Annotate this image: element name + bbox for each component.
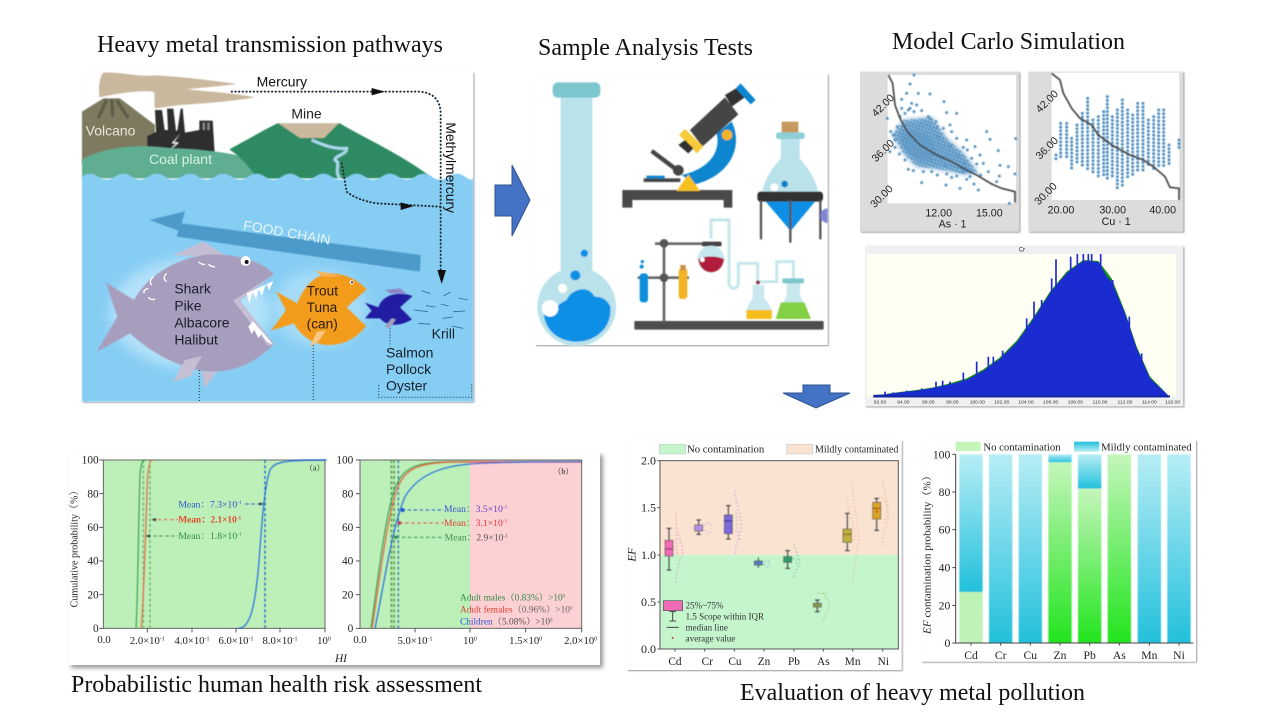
axes labels: 2.0×10 (130, 636, 160, 647)
axes labels: 6.0×10 (218, 636, 248, 647)
mean labels: （b） (553, 467, 573, 476)
mine hill (229, 123, 433, 178)
axes labels: 60 (342, 522, 354, 534)
chart: As scatter: 42.00 (870, 92, 897, 119)
bar: Ni (1167, 454, 1191, 643)
axes labels: 0 (945, 637, 951, 650)
chart: Cr histogram: 98.00 (946, 400, 959, 406)
panel: laboratory tests illustration (535, 73, 828, 346)
fish: small blue (365, 288, 413, 328)
axes labels: Cr (702, 656, 713, 668)
food web labels: Krill (432, 326, 455, 342)
legend: contamination classes (659, 444, 899, 455)
axes labels: As (1113, 649, 1126, 662)
smoke plume (99, 72, 255, 108)
chart: Cr histogram: 100.00 (970, 400, 985, 406)
fish names: large: Albacore (174, 315, 230, 331)
legend: contamination classes: Mildly contaminated (815, 444, 899, 455)
chart: Cr histogram: Cr (1019, 248, 1025, 254)
axes labels: 0 (539, 637, 542, 643)
axes labels (626, 454, 889, 668)
axes labels: Zn (1054, 649, 1067, 662)
legend: box plot key: 1.5 Scope within IQR (686, 612, 764, 622)
mean labels: Mean：7.3×10 (178, 499, 237, 510)
axes labels: -1 (248, 637, 253, 643)
legend: probability classes: Mildly contaminated (1101, 443, 1192, 454)
chart: Cu scatter: 42.00 (1034, 88, 1061, 115)
axes labels: 1.0 (641, 548, 656, 562)
bar: Mn (1138, 454, 1161, 643)
title: simulation: Model Carlo Simulation (892, 29, 1125, 55)
chart: Cr histogram: 92.00 (874, 400, 886, 406)
volcano (82, 98, 155, 163)
axes labels: Mn (845, 656, 861, 668)
legend: box plot key: average value (686, 633, 735, 643)
title: pollution evaluation: Evaluation of heavy metal pollution (740, 680, 1085, 706)
landscape labels: Mine (291, 105, 322, 121)
mean labels: -1 (237, 500, 242, 506)
food web labels: Pollock (386, 361, 432, 377)
landscape labels: Methylmercury (443, 122, 459, 213)
mean labels: -1 (503, 505, 508, 511)
axes labels: -1 (204, 637, 209, 643)
panel: probabilistic health risk charts (68, 452, 600, 665)
legend: box plot key: 25%~75% (686, 601, 724, 611)
chart: Cr histogram: 106.00 (1043, 400, 1059, 406)
legend: contamination classes: No contamination (687, 444, 765, 455)
axes labels: -1 (427, 637, 432, 643)
chart: Cr histogram (865, 246, 1183, 406)
legend: box plot key (663, 601, 764, 643)
axes labels: 80 (939, 486, 951, 499)
axes labels: 0.5 (641, 595, 656, 609)
chart: Cu scatter: 40.00 (1149, 205, 1176, 217)
chart: HI cumulative probability (a) (68, 455, 348, 665)
axes labels: Mn (1141, 649, 1158, 662)
title: sample analysis: Sample Analysis Tests (538, 35, 753, 61)
panel: EF box plot (626, 440, 902, 670)
axes labels: 0.0 (641, 642, 656, 656)
food web labels: Salmon (386, 344, 433, 360)
axes labels: EF contamination probability（%） (921, 470, 933, 635)
food web labels (386, 326, 455, 394)
mean labels: Mean：3.1×10 (444, 518, 503, 529)
chart: Cu scatter: 20.00 (1048, 205, 1074, 217)
panel: Monte Carlo simulation charts (860, 72, 1183, 406)
axes labels: 4.0×10 (174, 636, 204, 647)
chart: Cu scatter: 36.00 (1034, 135, 1061, 162)
axes labels: 10 (463, 636, 474, 647)
axes labels: As (817, 656, 830, 668)
fish names: large: Shark (174, 281, 212, 297)
landscape labels: Mercury (257, 74, 307, 90)
cdf curves (136, 460, 145, 628)
axes labels: 100 (933, 448, 951, 461)
legend: probability classes: No contamination (983, 442, 1061, 453)
box: Cd (665, 528, 673, 570)
bar: Zn (1048, 454, 1072, 643)
path arrowheads (372, 88, 446, 284)
axes labels: 60 (87, 522, 99, 534)
group exceedance legend: Children（5.08%）>10 (460, 617, 550, 627)
axes labels: Cd (668, 656, 682, 668)
chart: Cr histogram: 102.00 (994, 400, 1010, 406)
box: Zn (754, 558, 762, 568)
green shore (82, 146, 293, 178)
chart: Cr histogram: 114.00 (1142, 400, 1157, 406)
axes labels: 80 (87, 488, 99, 500)
axes labels: Cd (964, 649, 978, 662)
icon: big round flask (537, 82, 616, 346)
chart: Cr histogram: 116.00 (1165, 400, 1180, 406)
axes labels: 0 (328, 637, 331, 643)
chart: Cu scatter: Cu · 1 (1102, 216, 1131, 228)
chart: Cu scatter: 30.00 (1099, 205, 1126, 217)
axes labels: 20 (87, 589, 99, 601)
group exceedance legend: 0 (570, 607, 573, 612)
fish: shark (97, 242, 274, 388)
axes labels: 2.0 (641, 454, 656, 468)
axes labels: Pb (788, 656, 800, 668)
landscape labels: Coal plant (149, 151, 212, 167)
axes labels: 0.0 (353, 635, 367, 646)
axes labels (68, 455, 348, 665)
icon: lab apparatus (634, 220, 824, 330)
axes labels: 40 (87, 556, 99, 568)
axes labels: 1.5 (641, 501, 656, 515)
axes labels: 20 (342, 589, 354, 601)
mean labels: -1 (504, 533, 508, 539)
axes labels: HI (334, 653, 348, 665)
axes labels: 100 (82, 455, 99, 467)
fish names: medium: Tuna (307, 300, 338, 315)
axes labels: Ni (878, 656, 889, 668)
axes labels: 2.0×10 (564, 636, 594, 647)
arrow: to sample analysis (495, 165, 530, 236)
fish: trout (271, 270, 367, 347)
coal plant (147, 109, 215, 153)
axes labels: 100 (336, 455, 354, 467)
title: transmission pathways: Heavy metal transmission pathways (97, 32, 443, 58)
chart: HI cumulative probability (b) (336, 455, 597, 647)
chart: Cu scatter (1028, 72, 1183, 232)
krill swarm (414, 291, 468, 328)
axes labels: -1 (292, 637, 297, 643)
axes labels: 40 (939, 562, 951, 575)
icon: conical flask on stand (757, 122, 823, 243)
distribution dots (676, 480, 888, 620)
panel: EF contamination probability bars (921, 440, 1196, 662)
box: As (813, 600, 821, 612)
axes labels: 8.0×10 (262, 636, 292, 647)
mean labels: Mean：2.9×10 (445, 533, 504, 544)
landscape labels: Volcano (86, 122, 136, 138)
axes labels: 0 (348, 623, 354, 635)
group exceedance legend: 0 (563, 594, 566, 599)
mean labels: -1 (237, 515, 242, 521)
group exceedance legend: Adult females（0.96%）>10 (460, 606, 570, 616)
cdf curves (371, 462, 582, 628)
box: Ni (873, 498, 881, 530)
fish names: medium: (can) (307, 317, 338, 332)
axes labels: 5.0×10 (397, 636, 427, 647)
food web labels: Oyster (386, 378, 428, 394)
arrow: down to risk evaluation (783, 385, 850, 408)
mean leaders (402, 508, 444, 511)
axes labels: 1.5×10 (509, 636, 539, 647)
arrow: food chain: FOOD CHAIN (242, 218, 332, 248)
chart: Cu scatter: 30.00 (1032, 180, 1060, 208)
fish names: large: Halibut (174, 331, 218, 347)
reference dashes (143, 460, 150, 628)
mean labels: Mean：3.5×10 (444, 504, 503, 515)
axes labels: Cu (728, 656, 742, 668)
chart: Cr histogram: 108.00 (1068, 400, 1083, 406)
box: Pb (784, 551, 792, 568)
mean labels (178, 463, 325, 542)
stacked bars (959, 454, 1191, 643)
plot background (657, 461, 898, 652)
mean labels: Mean：1.8×10 (178, 531, 237, 542)
axes labels: 10 (317, 636, 328, 647)
box: Cu (724, 506, 732, 539)
axes labels: 0 (474, 637, 477, 643)
axes labels: 80 (342, 488, 354, 500)
landscape labels (86, 74, 459, 213)
legend: box plot key: median line (686, 623, 728, 633)
mean labels (444, 467, 573, 544)
bar: Cd (959, 454, 983, 643)
chart: Cr histogram: 112.00 (1118, 400, 1133, 406)
bar: Cr (989, 454, 1012, 643)
mean labels: -1 (237, 532, 242, 538)
axes labels: -1 (160, 637, 165, 643)
axes labels (921, 448, 1186, 662)
mean leaders (147, 534, 178, 537)
cut-off blue marker (820, 208, 828, 223)
group exceedance legend: 0 (550, 618, 553, 623)
chart: As scatter: 15.00 (976, 207, 1003, 219)
axes labels: 60 (939, 524, 951, 537)
axes labels: Cu (1024, 649, 1037, 662)
axes labels: Ni (1173, 649, 1186, 662)
axes labels: EF (626, 547, 638, 563)
chart: Cr histogram: 104.00 (1018, 400, 1034, 406)
mean labels: -1 (503, 519, 508, 525)
group exceedance legend (460, 592, 573, 627)
dotted mercury path (232, 92, 441, 273)
chart: Cr histogram: 110.00 (1093, 400, 1108, 406)
panel: transmission pathways illustration (82, 72, 473, 402)
axes labels (336, 455, 597, 647)
mean labels: Mean：2.1×10 (178, 516, 237, 526)
chart: Cr histogram: 96.00 (922, 400, 935, 406)
bar: Cu (1019, 454, 1042, 643)
chart: Cr histogram: 94.00 (897, 400, 910, 406)
mean labels: （a） (305, 463, 325, 472)
axes labels: Cumulative probability（%） (68, 486, 80, 607)
chart: As scatter: As · 1 (939, 219, 967, 231)
chart: As scatter: 12.00 (925, 207, 952, 219)
axes labels: Zn (758, 656, 771, 668)
title: health risk: Probabilistic human health risk assessment (71, 672, 482, 698)
axes labels: 0 (594, 637, 597, 643)
sea (82, 174, 473, 402)
bar: As (1108, 454, 1131, 643)
fish names: large: Pike (174, 298, 202, 314)
box: Cr (695, 520, 703, 534)
box: Mn (843, 513, 851, 551)
reference dashes (391, 460, 394, 628)
arrow: food chain (149, 211, 421, 272)
axes labels: 0.0 (97, 635, 111, 646)
axes labels: 40 (342, 556, 354, 568)
axes labels: Cr (995, 649, 1007, 662)
icon: microscope (622, 83, 756, 208)
chart: As scatter (860, 72, 1019, 232)
legend: probability classes (956, 442, 1192, 454)
fish names: medium: Trout (307, 283, 338, 298)
dotted brackets (199, 328, 472, 402)
chart: As scatter: 36.00 (870, 137, 897, 165)
axes labels: 20 (939, 599, 951, 612)
bar: Pb (1078, 454, 1101, 643)
axes labels: 0 (93, 623, 99, 635)
chart: As scatter: 30.00 (868, 183, 896, 210)
glow behind fish (110, 258, 270, 368)
axes labels: Pb (1084, 649, 1096, 662)
group exceedance legend: Adult males（0.83%）>10 (460, 593, 563, 603)
